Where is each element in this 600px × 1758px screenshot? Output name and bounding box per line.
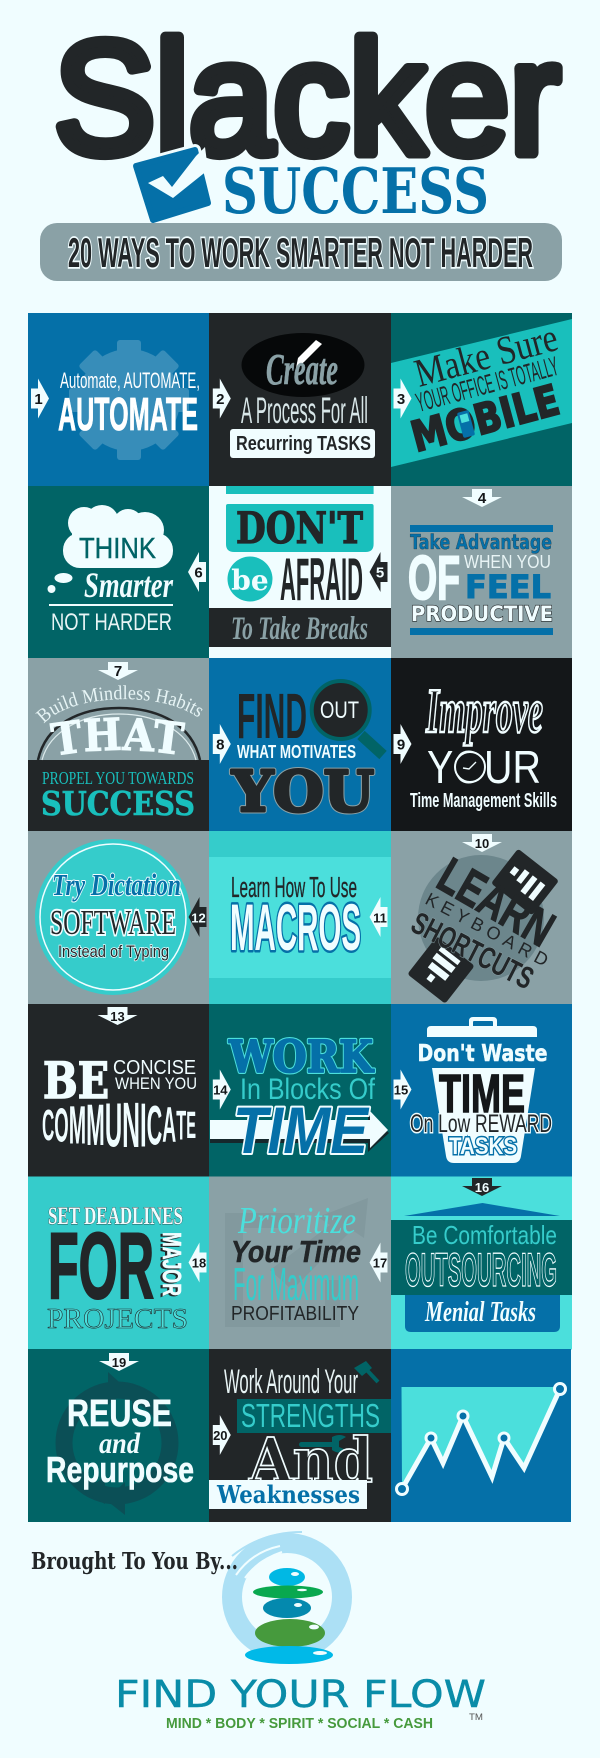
arrow 13: 13	[110, 1009, 125, 1024]
big green stone	[255, 1619, 325, 1647]
arrow 10: 10	[475, 836, 489, 851]
trademark: TM	[469, 1712, 483, 1722]
text: communicate: U	[105, 1091, 122, 1160]
text: your: YOUR	[427, 741, 541, 793]
text: when you: WHEN YOU	[115, 1074, 197, 1093]
panel 1: automate	[28, 313, 210, 486]
arrow 14	[213, 1070, 231, 1110]
text: productive: PRODUCTIVE	[411, 602, 553, 626]
text: Create: Create	[266, 345, 338, 394]
text: AUTOMATE: AUTOMATE	[58, 388, 198, 440]
text: and: And	[248, 1424, 373, 1497]
text: when you: WHEN YOU	[464, 552, 551, 572]
title: Slacker: Slacker	[54, 8, 560, 187]
text: set deadlines: SET DEADLINES	[48, 1203, 183, 1230]
arrow 10	[462, 834, 502, 852]
logo text: find your flow: FIND YOUR FLOW	[115, 1673, 486, 1716]
arrow 19: 19	[112, 1355, 126, 1370]
chart line	[402, 1389, 560, 1489]
text: communicate: I	[140, 1091, 147, 1160]
arrow 8	[213, 724, 231, 764]
label box: Recurring Tasks	[230, 429, 375, 458]
arrow 12: 12	[191, 910, 206, 926]
arrow 16: 16	[475, 1180, 489, 1195]
arrow 20: 20	[213, 1428, 228, 1443]
arrow 15	[394, 1070, 412, 1110]
text: projects: PROJECTS	[47, 1303, 188, 1335]
panel 20: strengths and weaknesses	[209, 1349, 391, 1522]
text: communicate: C	[42, 1101, 54, 1150]
box: menial tasks: Menial Tasks	[424, 1297, 536, 1328]
text: major: MAJOR	[155, 1233, 185, 1297]
icon: keyboard top	[491, 849, 559, 915]
arrow 17	[370, 1242, 388, 1282]
text: reuse: REUSE	[67, 1393, 172, 1435]
arrow 5: 5	[376, 564, 384, 582]
icon: clock	[455, 752, 485, 782]
panel 19: reuse and repurpose	[28, 1349, 210, 1522]
band: strengths: STRENGTHS	[241, 1397, 380, 1434]
arrow 13	[98, 1007, 138, 1025]
arrow 4: 4	[478, 490, 487, 507]
infographic canvas: AFRAID	[280, 546, 363, 613]
text: shortcuts: SHORTCUTS	[406, 905, 539, 996]
text: work: WORK	[228, 1032, 375, 1083]
arrow 19	[99, 1353, 139, 1371]
text: work: WORK	[228, 1032, 375, 1083]
arrow 11	[370, 897, 388, 937]
panel: line chart	[391, 1349, 571, 1522]
icon: hammer	[354, 1361, 378, 1382]
icon: check box	[136, 147, 208, 220]
label box: Recurring Tasks: Recurring TASKS	[236, 433, 371, 455]
text: major: MAJOR	[157, 1232, 187, 1296]
arrow 11: 11	[373, 910, 387, 926]
big arrow	[210, 1111, 389, 1152]
text: success: SUCCESS	[41, 784, 195, 823]
band: be comfortable outsourcing: Be Comfortable	[412, 1220, 557, 1250]
arrow 4	[462, 489, 502, 507]
text: don't waste: Don't Waste	[418, 1041, 548, 1067]
text: feel: FEEL	[465, 568, 551, 606]
text: profitability: PROFITABILITY	[231, 1303, 359, 1325]
text: you: YOU	[231, 759, 374, 825]
panel 6: think smarter	[28, 486, 210, 659]
arrow 6: 6	[194, 564, 203, 582]
arch	[38, 708, 200, 760]
arrow 5	[370, 552, 388, 592]
text: Think: THINK	[79, 533, 157, 565]
box: weaknesses: Weaknesses	[216, 1480, 360, 1509]
panel 7: mindless habits	[28, 658, 209, 831]
text: in blocks of: In Blocks Of	[240, 1073, 376, 1106]
text: that: THAT	[49, 717, 186, 756]
icon: gear	[69, 340, 189, 460]
text: software: SOFTWARE	[50, 903, 176, 942]
text: communicate: A	[162, 1097, 176, 1153]
text: prioritize: Prioritize	[237, 1200, 356, 1242]
arrow 9: 9	[397, 736, 405, 754]
panel 15: don't waste time	[391, 1004, 572, 1177]
text: learn how to use: Learn How To Use	[231, 872, 357, 904]
panel 13: be concise: E	[186, 1105, 196, 1147]
panel 18: set deadlines	[28, 1176, 210, 1350]
arrow 2: 2	[216, 391, 224, 408]
logo tagline: MIND * BODY * SPIRIT * SOCIAL * CASH	[166, 1716, 433, 1732]
text: brought to you by: Brought To You By...	[31, 1548, 238, 1575]
panel 9: improve your time management	[391, 658, 572, 831]
text: and: and	[99, 1427, 141, 1460]
icon: recycle arrows	[64, 1372, 170, 1515]
band: be comfortable outsourcing	[391, 1220, 572, 1296]
icon: phone	[457, 410, 475, 438]
text: your time: Your Time	[231, 1234, 361, 1269]
band: to take breaks: To Take Breaks	[231, 611, 368, 647]
panel 17: prioritize	[209, 1176, 391, 1350]
text: major	[155, 1232, 187, 1297]
text: communicate: T	[176, 1101, 186, 1148]
panel 13: be concise	[28, 1004, 210, 1177]
text: communicate: M	[69, 1096, 86, 1156]
arrow 2	[213, 378, 231, 418]
arrow 17: 17	[373, 1256, 387, 1270]
arrow 1: 1	[34, 391, 43, 408]
icon: trash can	[427, 1017, 537, 1163]
box: menial tasks	[405, 1295, 560, 1332]
icon: keyboard bottom	[407, 936, 475, 1004]
circle badge	[35, 839, 191, 995]
text: you: YOU	[231, 759, 374, 825]
arrow 3	[394, 378, 412, 418]
arrow 9	[394, 724, 412, 764]
text: communicate: O	[54, 1100, 69, 1152]
panel 3: mobile office	[391, 313, 572, 486]
arrow 20	[213, 1415, 231, 1455]
text: tasks: TASKS	[449, 1133, 517, 1160]
panel 5: don't be afraid	[209, 486, 391, 659]
text: time: TIME	[233, 1093, 370, 1167]
thought bubbles	[48, 573, 72, 593]
text: what motivates: WHAT MOTIVATES	[237, 742, 356, 762]
icon: pencil	[296, 340, 322, 368]
text: communicate: N	[122, 1089, 140, 1161]
text: of: OF	[408, 544, 460, 613]
text: Not harder: NOT HARDER	[51, 609, 172, 636]
highlights	[291, 1572, 327, 1655]
panel 8: find out what motivates you: FIND	[237, 680, 307, 752]
text: keyboard: KEYBOARD	[422, 889, 552, 970]
panel 2: create a process: A Process For All	[241, 390, 368, 431]
blue stone	[263, 1598, 311, 1618]
arrow 16	[462, 1178, 502, 1196]
arrow 8: 8	[216, 736, 224, 754]
panel 12: dictation software	[28, 831, 210, 1004]
icon: magnifier	[312, 681, 383, 755]
panel 14: work in blocks of time	[209, 1004, 391, 1177]
arrow 14: 14	[213, 1082, 228, 1098]
text: out: OUT	[320, 697, 359, 724]
icon: cloud	[63, 505, 173, 568]
text: repurpose: Repurpose	[46, 1449, 194, 1490]
text: propel you towards: PROPEL YOU TOWARDS	[42, 768, 194, 788]
text: take advantage: Take Advantage	[410, 530, 552, 554]
logo: stones in ring	[232, 1532, 342, 1664]
arrow 12	[188, 897, 206, 937]
arrow 1	[31, 378, 49, 418]
panel 11: macros: MACROS	[230, 890, 361, 964]
panel 4: take advantage	[391, 486, 572, 659]
text: time: TIME	[439, 1064, 525, 1124]
faint check arrow	[225, 1198, 368, 1327]
text: communicate: M	[86, 1093, 105, 1158]
box: don't: DON'T	[236, 504, 363, 554]
subtitle: Success: SUCCESS	[222, 154, 489, 228]
panel 11: macros	[209, 831, 391, 1004]
panel 17: prioritize: For Maximum	[233, 1258, 359, 1310]
ellipse	[242, 333, 364, 397]
text: communicate: C	[147, 1093, 162, 1156]
text: instead of typing: Instead of Typing	[58, 942, 169, 961]
panel 16: outsourcing	[391, 1176, 572, 1350]
text: Automate, AUTOMATE,: Automate, AUTOMATE,	[60, 368, 200, 393]
chart area	[402, 1387, 560, 1489]
panel 2: create a process	[209, 313, 391, 486]
arrow 15: 15	[394, 1082, 408, 1098]
arrow 7	[98, 662, 138, 680]
badge: be	[228, 556, 272, 602]
text: for: FOR	[48, 1213, 154, 1318]
text: be: BE	[43, 1051, 109, 1110]
text: concise: CONCISE	[113, 1057, 196, 1079]
band: to take breaks	[209, 608, 391, 647]
arrow 3: 3	[397, 391, 405, 408]
text: Make Sure: Make Sure	[410, 314, 562, 396]
chart points	[396, 1384, 566, 1494]
arrow 18: 18	[192, 1256, 206, 1270]
arrow 18	[188, 1242, 206, 1282]
text: Smarter: Smarter	[84, 565, 174, 605]
arrow 7: 7	[114, 663, 122, 680]
top stone	[269, 1568, 305, 1586]
slanted band	[391, 319, 572, 467]
arrow 6	[188, 552, 206, 592]
brush ring	[232, 1532, 342, 1651]
badge: be: be	[231, 564, 269, 597]
text: Mobile: MOBILE	[406, 375, 564, 462]
panel 8: find out what motivates you	[209, 658, 391, 831]
text: build mindless habits: Build Mindless Habits	[36, 685, 202, 724]
icon: wrench	[299, 1435, 346, 1452]
panel 10: keyboard shortcuts	[391, 831, 572, 1004]
base stone	[245, 1646, 333, 1664]
flat green stone	[253, 1586, 323, 1598]
text: try dictation: Try Dictation	[52, 867, 181, 902]
panel 20: strengths and weaknesses: Work Around Your	[224, 1363, 358, 1401]
